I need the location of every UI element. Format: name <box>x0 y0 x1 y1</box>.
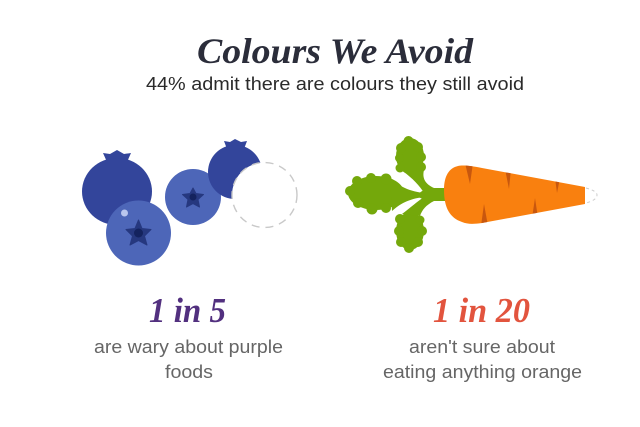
stat: 1 in 5: 1 in 5 <box>149 291 226 330</box>
caption: purple foods: are wary about purple <box>94 337 283 357</box>
stat: 1 in 20: 1 in 20 <box>433 291 530 330</box>
caption: orange foods: aren't sure about <box>409 337 555 357</box>
cut-open blueberry, front <box>106 200 171 266</box>
carrot leaves <box>345 136 446 253</box>
bottom leaf <box>394 197 434 253</box>
caption: purple foods: foods <box>165 362 213 382</box>
dashed missing-berry outline <box>232 162 297 228</box>
caption: orange foods: eating anything orange <box>383 362 582 382</box>
caption: purple foods <box>94 337 283 382</box>
subtitle: 44% admit there are colours they still avoid <box>146 74 524 94</box>
cut-open blueberry, middle <box>165 169 221 225</box>
left leaf <box>345 173 424 214</box>
carrot markings <box>465 163 560 226</box>
icon: blueberries <box>82 139 297 266</box>
stem <box>418 188 446 201</box>
icon: carrot <box>345 136 597 253</box>
leaf gaps <box>398 177 421 212</box>
title: Colours We Avoid <box>197 31 474 71</box>
dashed carrot tip <box>586 188 597 203</box>
dark blueberry, partly missing <box>208 139 262 199</box>
top leaf <box>395 136 434 193</box>
carrot body <box>444 166 585 224</box>
caption: orange foods <box>383 337 582 382</box>
large dark blueberry <box>82 150 152 225</box>
